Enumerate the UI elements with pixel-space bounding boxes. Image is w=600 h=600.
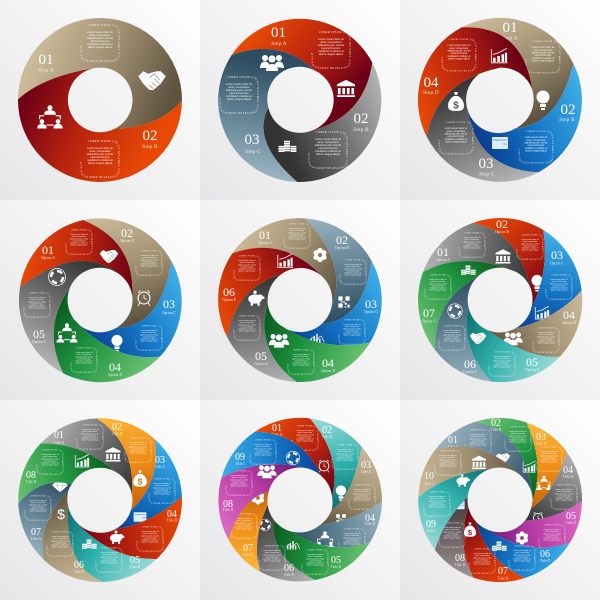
- segment 02 Step B: LOREM IPSUM DOLOR SIT AMET, CONSECTETUR ADIPISCING ELIT: [518, 130, 554, 164]
- segment 06 Title F: LOREM IPSUM DOLOR SIT AMET, CONSECTETUR ADIPISCING ELIT: [259, 545, 286, 572]
- segment 05 Title E: Lorem ipsum dolor sit amet, consectetur adipisicing elit, sed do eiusmod tempor incididunt ut labore et dolore magna aliqua: [543, 529, 561, 541]
- segment 01 Step A: LOREM IPSUM DOLOR SIT AMET, CONSECTETUR ADIPISCING ELIT: [311, 31, 351, 69]
- segment 05 Title E: [274, 520, 370, 580]
- segment 08 Title H: Title H: [455, 563, 466, 567]
- segment 04 Option D: [54, 288, 160, 382]
- segment 02 Option B: LOREM IPSUM DOLOR SIT AMET, CONSECTETUR ADIPISCING ELIT: [135, 250, 163, 276]
- segment 04 Title D: LOREM IPSUM DOLOR SIT AMET, CONSECTETUR ADIPISCING ELIT: [136, 526, 164, 552]
- segment 01 Option A: 01: [42, 243, 54, 257]
- segment 06 Title F: LOREM IPSUM DOLOR SIT AMET, CONSECTETUR ADIPISCING ELIT: [509, 545, 536, 572]
- segment 04 Step D: Step D: [423, 90, 439, 96]
- segment 05 Title E: Lorem ipsum dolor sit amet, consectetur adipisicing elit, sed do eiusmod tempor incididunt ut labore et dolore magna aliqua: [306, 554, 324, 566]
- segment 02 Step B: [264, 62, 382, 182]
- segment 07 Option G: [418, 261, 516, 350]
- segment 01 Option A: 01: [259, 228, 271, 242]
- segment 02 Option B: Lorem ipsum dolor sit amet, consectetur adipisicing elit, sed do eiusmod tempor incididunt ut labore et dolore magna aliqua: [521, 239, 539, 251]
- segment 10 Title J: LOREM IPSUM DOLOR SIT AMET, CONSECTETUR ADIPISCING ELIT: [435, 450, 462, 477]
- segment 08 Title H: Title H: [26, 480, 37, 484]
- segment 04 Title D: 04: [563, 465, 573, 476]
- segment 04 Option D: Lorem ipsum dolor sit amet, consectetur adipisicing elit, sed do eiusmod tempor incididunt ut labore et dolore magna aliqua: [75, 352, 93, 364]
- segment 10 Title J: Title J: [424, 482, 434, 486]
- segment 10 Title J: Lorem ipsum dolor sit amet, consectetur adipisicing elit, sed do eiusmod tempor incididunt ut labore et dolore magna aliqua: [439, 455, 457, 467]
- segment 02 Step B: [18, 68, 182, 182]
- segment 04 Option D: LOREM IPSUM DOLOR SIT AMET, CONSECTETUR ADIPISCING ELIT: [287, 349, 315, 375]
- segment 06 Title F: Title F: [74, 570, 84, 574]
- panel: 9-title ring: [218, 418, 382, 582]
- panel: 3-step ring: [218, 18, 382, 182]
- segment 03 Option C: 03: [551, 248, 563, 262]
- segment 10 Title J: 10: [424, 471, 434, 482]
- segment 02 Option B: 02: [496, 217, 508, 231]
- segment 05 Title E: LOREM IPSUM DOLOR SIT AMET, CONSECTETUR ADIPISCING ELIT: [95, 547, 123, 573]
- segment 06 Title F: Lorem ipsum dolor sit amet, consectetur adipisicing elit, sed do eiusmod tempor incididunt ut labore et dolore magna aliqua: [513, 550, 531, 562]
- segment 02 Option B: Option B: [495, 230, 510, 234]
- segment 05 Title E: [487, 501, 582, 551]
- segment 02 Step B: [468, 64, 582, 172]
- segment 03 Title C: Title C: [536, 442, 547, 446]
- segment 06 Title F: 06: [540, 549, 550, 560]
- segment 02 Step B: Step B: [142, 144, 158, 150]
- segment 05 Option E: Lorem ipsum dolor sit amet, consectetur adipisicing elit, sed do eiusmod tempor incididunt ut labore et dolore magna aliqua: [238, 320, 256, 332]
- segment 01 Option A: [232, 218, 336, 306]
- segment 02 Title B: Title B: [112, 432, 123, 436]
- segment 02 Option B: [84, 218, 172, 328]
- segment 02 Option B: 02: [121, 226, 133, 240]
- segment 03 Option C: LOREM IPSUM DOLOR SIT AMET, CONSECTETUR ADIPISCING ELIT: [545, 274, 573, 300]
- segment 04 Title D: [525, 452, 582, 524]
- segment 03 Step C: Lorem ipsum dolor sit amet, consectetur adipisicing elit, sed do eiusmod tempor incididunt ut labore et dolore magna aliqua: [226, 83, 252, 101]
- segment 06 Option F: 06: [464, 357, 476, 371]
- segment 07 Option G: Option G: [422, 320, 436, 324]
- segment 04 Option D: Option D: [108, 373, 122, 377]
- segment 01 Title A: [255, 418, 334, 497]
- segment 07 Title G: Lorem ipsum dolor sit amet, consectetur adipisicing elit, sed do eiusmod tempor incididunt ut labore et dolore magna aliqua: [29, 500, 47, 512]
- panel: 6-option ring: [218, 218, 382, 382]
- segment 05 Option E: 05: [255, 349, 267, 363]
- segment 04 Title D: Lorem ipsum dolor sit amet, consectetur adipisicing elit, sed do eiusmod tempor incididunt ut labore et dolore magna aliqua: [343, 533, 361, 545]
- segment 08 Title H: 08: [26, 470, 36, 481]
- segment 03 Title C: 03: [536, 432, 546, 443]
- segment 08 Title H: LOREM IPSUM DOLOR SIT AMET, CONSECTETUR ADIPISCING ELIT: [36, 449, 64, 475]
- segment 06 Title F: LOREM IPSUM DOLOR SIT AMET, CONSECTETUR ADIPISCING ELIT: [46, 531, 74, 557]
- segment 06 Option F: [218, 248, 322, 338]
- segment 02 Title B: Lorem ipsum dolor sit amet, consectetur adipisicing elit, sed do eiusmod tempor incididunt ut labore et dolore magna aliqua: [509, 431, 527, 443]
- segment 06 Title F: 06: [74, 560, 84, 571]
- segment 01 Title A: LOREM IPSUM DOLOR SIT AMET, CONSECTETUR ADIPISCING ELIT: [291, 425, 319, 451]
- segment 04 Step D: LOREM IPSUM DOLOR SIT AMET, CONSECTETUR ADIPISCING ELIT: [442, 38, 476, 72]
- segment 01 Step A: Step A: [502, 36, 518, 42]
- segment 04 Option D: 04: [563, 308, 575, 322]
- segment 06 Title F: Lorem ipsum dolor sit amet, consectetur adipisicing elit, sed do eiusmod tempor incididunt ut labore et dolore magna aliqua: [51, 536, 69, 548]
- segment 04 Title D: Lorem ipsum dolor sit amet, consectetur adipisicing elit, sed do eiusmod tempor incididunt ut labore et dolore magna aliqua: [555, 489, 573, 501]
- segment 08 Title H: Lorem ipsum dolor sit amet, consectetur adipisicing elit, sed do eiusmod tempor incididunt ut labore et dolore magna aliqua: [230, 475, 248, 487]
- segment 05 Title E: Title E: [331, 565, 342, 569]
- segment 04 Title D: [78, 496, 182, 559]
- segment 05 Option E: Option E: [32, 340, 47, 344]
- segment 09 Title I: [418, 469, 490, 550]
- panel: 10-title ring: [418, 418, 582, 582]
- segment 03 Step C: Lorem ipsum dolor sit amet, consectetur adipisicing elit, sed do eiusmod tempor incididunt ut labore et dolore magna aliqua: [444, 127, 468, 143]
- segment 02 Title B: [96, 418, 156, 510]
- segment 06 Title F: [257, 505, 315, 582]
- segment 09 Title I: Title I: [426, 529, 436, 533]
- segment 05 Title E: LOREM IPSUM DOLOR SIT AMET, CONSECTETUR ADIPISCING ELIT: [539, 524, 566, 551]
- segment 08 Title H: LOREM IPSUM DOLOR SIT AMET, CONSECTETUR ADIPISCING ELIT: [439, 522, 466, 549]
- segment 02 Title B: Lorem ipsum dolor sit amet, consectetur adipisicing elit, sed do eiusmod tempor incididunt ut labore et dolore magna aliqua: [129, 442, 147, 454]
- segment 05 Title E: Title E: [566, 521, 577, 525]
- segment 07 Title G: $: [468, 528, 473, 537]
- segment 01 Title A: Lorem ipsum dolor sit amet, consectetur adipisicing elit, sed do eiusmod tempor incididunt ut labore et dolore magna aliqua: [469, 434, 487, 446]
- segment 02 Step B: 02: [354, 111, 368, 127]
- segment 03 Step C: LOREM IPSUM DOLOR SIT AMET, CONSECTETUR ADIPISCING ELIT: [219, 76, 259, 114]
- segment 05 Option E: LOREM IPSUM DOLOR SIT AMET, CONSECTETUR ADIPISCING ELIT: [233, 315, 261, 341]
- segment 08 Title H: [218, 464, 303, 539]
- segment 02 Title B: [310, 418, 362, 510]
- segment 04 Option D: 04: [109, 360, 121, 374]
- segment 03 Title C: LOREM IPSUM DOLOR SIT AMET, CONSECTETUR ADIPISCING ELIT: [348, 484, 376, 510]
- segment 05 Option E: [466, 306, 560, 382]
- segment 06 Title F: [42, 490, 104, 582]
- segment 08 Title H: [435, 497, 473, 578]
- segment 06 Title F: 06: [284, 563, 294, 574]
- segment 06 Option F: Lorem ipsum dolor sit amet, consectetur adipisicing elit, sed do eiusmod tempor incididunt ut labore et dolore magna aliqua: [443, 330, 461, 342]
- segment 02 Step B: Lorem ipsum dolor sit amet, consectetur adipisicing elit, sed do eiusmod tempor incididunt ut labore et dolore magna aliqua: [315, 138, 341, 156]
- segment 08 Title H: [18, 443, 115, 503]
- segment 04 Option D: [264, 304, 370, 382]
- segment 08 Title H: Title H: [223, 508, 234, 512]
- panel: 7-option ring: [418, 217, 582, 382]
- segment 09 Title I: 09: [426, 519, 436, 530]
- segment 03 Step C: Step C: [479, 172, 495, 178]
- segment 05 Option E: LOREM IPSUM DOLOR SIT AMET, CONSECTETUR ADIPISCING ELIT: [488, 351, 516, 377]
- segment 07 Title G: 07: [498, 566, 508, 577]
- segment 02 Step B: LOREM IPSUM DOLOR SIT AMET, CONSECTETUR ADIPISCING ELIT: [308, 131, 348, 169]
- segment 02 Title B: 02: [112, 422, 122, 433]
- segment 04 Title D: 04: [167, 509, 177, 520]
- segment 10 Title J: [418, 446, 525, 497]
- segment 04 Step D: Lorem ipsum dolor sit amet, consectetur adipisicing elit, sed do eiusmod tempor incididunt ut labore et dolore magna aliqua: [447, 44, 471, 60]
- segment 07 Option G: Lorem ipsum dolor sit amet, consectetur adipisicing elit, sed do eiusmod tempor incididunt ut labore et dolore magna aliqua: [429, 279, 447, 291]
- segment 05 Option E: [227, 274, 296, 382]
- segment 03 Step C: 03: [478, 156, 494, 172]
- segment 01 Title A: LOREM IPSUM DOLOR SIT AMET, CONSECTETUR ADIPISCING ELIT: [465, 429, 492, 456]
- segment 06 Option F: LOREM IPSUM DOLOR SIT AMET, CONSECTETUR ADIPISCING ELIT: [438, 325, 466, 351]
- segment 01 Title A: Lorem ipsum dolor sit amet, consectetur adipisicing elit, sed do eiusmod tempor incididunt ut labore et dolore magna aliqua: [296, 430, 314, 442]
- segment 02 Option B: LOREM IPSUM DOLOR SIT AMET, CONSECTETUR ADIPISCING ELIT: [516, 234, 544, 260]
- segment 02 Title B: Title B: [491, 428, 502, 432]
- segment 05 Option E: Option E: [525, 368, 540, 372]
- segment 04 Title D: Title D: [167, 518, 178, 522]
- segment 05 Option E: 05: [33, 327, 45, 341]
- segment 03 Option C: LOREM IPSUM DOLOR SIT AMET, CONSECTETUR ADIPISCING ELIT: [135, 325, 163, 351]
- segment 06 Option F: [435, 277, 492, 382]
- segment 01 Title A: 01: [272, 423, 282, 434]
- segment 02 Step B: 02: [560, 102, 576, 118]
- segment 01 Step A: LOREM IPSUM DOLOR SIT AMET, CONSECTETUR ADIPISCING ELIT: [80, 24, 120, 62]
- segment 01 Title A: [40, 418, 132, 495]
- segment 02 Title B: LOREM IPSUM DOLOR SIT AMET, CONSECTETUR ADIPISCING ELIT: [331, 444, 359, 470]
- segment 08 Title H: 08: [223, 499, 233, 510]
- segment 04 Title D: [292, 502, 382, 555]
- segment 01 Option A: [20, 220, 132, 296]
- segment 04 Title D: Title D: [563, 475, 574, 479]
- segment 06 Option F: LOREM IPSUM DOLOR SIT AMET, CONSECTETUR ADIPISCING ELIT: [233, 255, 261, 281]
- segment 02 Step B: LOREM IPSUM DOLOR SIT AMET, CONSECTETUR ADIPISCING ELIT: [80, 140, 120, 178]
- segment 03 Step C: Step C: [245, 149, 261, 155]
- segment 03 Step C: [218, 48, 315, 182]
- segment 02 Option B: Lorem ipsum dolor sit amet, consectetur adipisicing elit, sed do eiusmod tempor incididunt ut labore et dolore magna aliqua: [344, 264, 362, 276]
- segment 01 Step A: 01: [502, 20, 518, 36]
- segment 02 Step B: Step B: [559, 117, 575, 123]
- segment 04 Title D: Title D: [365, 522, 376, 526]
- segment 03 Option C: [280, 261, 382, 346]
- segment 05 Option E: 05: [526, 355, 538, 369]
- segment 01 Title A: Lorem ipsum dolor sit amet, consectetur adipisicing elit, sed do eiusmod tempor incididunt ut labore et dolore magna aliqua: [81, 429, 99, 441]
- segment 09 Title I: Lorem ipsum dolor sit amet, consectetur adipisicing elit, sed do eiusmod tempor incididunt ut labore et dolore magna aliqua: [428, 496, 446, 508]
- segment 03 Title C: 03: [155, 455, 165, 466]
- segment 09 Title I: LOREM IPSUM DOLOR SIT AMET, CONSECTETUR ADIPISCING ELIT: [424, 491, 451, 518]
- segment 02 Option B: Option B: [120, 239, 135, 243]
- segment 07 Option G: 07: [423, 306, 435, 320]
- segment 01 Title A: Title A: [272, 433, 283, 437]
- segment 02 Step B: Lorem ipsum dolor sit amet, consectetur adipisicing elit, sed do eiusmod tempor incididunt ut labore et dolore magna aliqua: [524, 136, 548, 152]
- segment 03 Title C: [527, 423, 567, 508]
- segment 03 Title C: LOREM IPSUM DOLOR SIT AMET, CONSECTETUR ADIPISCING ELIT: [148, 478, 176, 504]
- segment 04 Title D: Lorem ipsum dolor sit amet, consectetur adipisicing elit, sed do eiusmod tempor incididunt ut labore et dolore magna aliqua: [141, 531, 159, 543]
- segment 02 Option B: Lorem ipsum dolor sit amet, consectetur adipisicing elit, sed do eiusmod tempor incididunt ut labore et dolore magna aliqua: [140, 255, 158, 267]
- segment 01 Step A: LOREM IPSUM DOLOR SIT AMET, CONSECTETUR ADIPISCING ELIT: [526, 40, 560, 74]
- segment 06 Title F: Title F: [284, 573, 294, 577]
- segment 05 Option E: [18, 260, 114, 373]
- segment 04 Option D: [488, 290, 582, 357]
- segment 06 Option F: Lorem ipsum dolor sit amet, consectetur adipisicing elit, sed do eiusmod tempor incididunt ut labore et dolore magna aliqua: [238, 260, 256, 272]
- segment 03 Title C: Lorem ipsum dolor sit amet, consectetur adipisicing elit, sed do eiusmod tempor incididunt ut labore et dolore magna aliqua: [153, 483, 171, 495]
- segment 09 Title I: LOREM IPSUM DOLOR SIT AMET, CONSECTETUR ADIPISCING ELIT: [250, 439, 277, 466]
- segment 02 Title B: 02: [491, 418, 501, 429]
- segment 05 Option E: Lorem ipsum dolor sit amet, consectetur adipisicing elit, sed do eiusmod tempor incididunt ut labore et dolore magna aliqua: [493, 356, 511, 368]
- segment 07 Title G: Title G: [31, 537, 42, 541]
- panel: 8-title ring: [18, 418, 182, 582]
- segment 05 Option E: Option E: [254, 362, 269, 366]
- panel: 4-step ring: [418, 18, 582, 182]
- segment 05 Option E: Lorem ipsum dolor sit amet, consectetur adipisicing elit, sed do eiusmod tempor incididunt ut labore et dolore magna aliqua: [28, 297, 46, 309]
- segment 02 Title B: 02: [322, 425, 332, 436]
- segment 01 Title A: LOREM IPSUM DOLOR SIT AMET, CONSECTETUR ADIPISCING ELIT: [76, 424, 104, 450]
- panel: 2-step ring: [18, 18, 182, 182]
- segment 05 Title E: Title E: [130, 565, 141, 569]
- segment 03 Title C: [115, 440, 182, 530]
- segment 04 Option D: Lorem ipsum dolor sit amet, consectetur adipisicing elit, sed do eiusmod tempor incididunt ut labore et dolore magna aliqua: [537, 332, 555, 344]
- segment 01 Option A: Lorem ipsum dolor sit amet, consectetur adipisicing elit, sed do eiusmod tempor incididunt ut labore et dolore magna aliqua: [463, 237, 481, 249]
- segment 03 Step C: 03: [244, 132, 260, 148]
- segment 04 Step D: [418, 27, 532, 136]
- segment 01 Step A: [232, 18, 372, 130]
- segment 07 Title G: LOREM IPSUM DOLOR SIT AMET, CONSECTETUR ADIPISCING ELIT: [469, 548, 496, 575]
- segment 01 Title A: Title A: [54, 441, 65, 445]
- segment 03 Step C: [426, 68, 538, 182]
- segment 03 Title C: Title C: [155, 465, 166, 469]
- segment 01 Step A: [18, 18, 182, 128]
- segment 01 Step A: 01: [271, 25, 286, 41]
- segment 07 Title G: 07: [243, 543, 253, 554]
- segment 04 Title D: LOREM IPSUM DOLOR SIT AMET, CONSECTETUR ADIPISCING ELIT: [551, 484, 578, 511]
- segment 07 Title G: [463, 507, 525, 582]
- segment 01 Option A: 01: [437, 245, 449, 259]
- segment 02 Step B: 02: [142, 128, 158, 144]
- segment 03 Title C: Lorem ipsum dolor sit amet, consectetur adipisicing elit, sed do eiusmod tempor incididunt ut labore et dolore magna aliqua: [540, 451, 558, 463]
- segment 02 Option B: 02: [336, 233, 348, 247]
- segment 06 Title F: Title F: [540, 559, 550, 563]
- segment 01 Option A: Option A: [41, 256, 55, 260]
- segment 06 Option F: 06: [223, 285, 235, 299]
- segment 04 Title D: 04: [365, 513, 375, 524]
- segment 07 Title G: LOREM IPSUM DOLOR SIT AMET, CONSECTETUR ADIPISCING ELIT: [231, 513, 258, 540]
- segment 01 Step A: Step A: [38, 68, 54, 74]
- segment 05 Title E: 05: [130, 555, 140, 566]
- segment 03 Option C: LOREM IPSUM DOLOR SIT AMET, CONSECTETUR ADIPISCING ELIT: [338, 319, 366, 345]
- segment 09 Title I: [222, 432, 321, 477]
- segment 04 Option D: LOREM IPSUM DOLOR SIT AMET, CONSECTETUR ADIPISCING ELIT: [532, 327, 560, 353]
- panel: 5-option ring: [18, 218, 182, 382]
- segment 06 Title F: [476, 522, 570, 578]
- segment 04 Option D: Lorem ipsum dolor sit amet, consectetur adipisicing elit, sed do eiusmod tempor incididunt ut labore et dolore magna aliqua: [292, 354, 310, 366]
- segment 03 Option C: [515, 230, 582, 328]
- segment 04 Option D: LOREM IPSUM DOLOR SIT AMET, CONSECTETUR ADIPISCING ELIT: [70, 347, 98, 373]
- segment 08 Title H: 08: [455, 553, 465, 564]
- segment 03 Option C: Option C: [550, 262, 565, 266]
- segment 08 Title H: Lorem ipsum dolor sit amet, consectetur adipisicing elit, sed do eiusmod tempor incididunt ut labore et dolore magna aliqua: [41, 454, 59, 466]
- segment 04 Title D: LOREM IPSUM DOLOR SIT AMET, CONSECTETUR ADIPISCING ELIT: [338, 528, 366, 548]
- segment 08 Title H: LOREM IPSUM DOLOR SIT AMET, CONSECTETUR ADIPISCING ELIT: [226, 470, 253, 497]
- segment 04 Step D: 04: [424, 75, 439, 91]
- segment 06 Option F: Option F: [463, 370, 477, 374]
- segment 03 Title C: 03: [361, 460, 371, 471]
- segment 01 Title A: Title A: [448, 445, 459, 449]
- segment 01 Step A: Lorem ipsum dolor sit amet, consectetur adipisicing elit, sed do eiusmod tempor incididunt ut labore et dolore magna aliqua: [531, 46, 555, 62]
- segment 03 Title C: LOREM IPSUM DOLOR SIT AMET, CONSECTETUR ADIPISCING ELIT: [536, 446, 563, 473]
- segment 07 Title G: [18, 481, 72, 559]
- segment 03 Option C: Option C: [162, 311, 177, 315]
- segment 01 Step A: 01: [38, 52, 54, 68]
- segment 07 Title G: Title G: [243, 553, 254, 557]
- segment 02 Title B: Title B: [322, 435, 333, 439]
- segment 01 Step A: Step A: [271, 41, 287, 47]
- segment 03 Step C: $: [453, 100, 459, 112]
- segment 05 Option E: LOREM IPSUM DOLOR SIT AMET, CONSECTETUR ADIPISCING ELIT: [23, 292, 51, 318]
- segment 02 Step B: Lorem ipsum dolor sit amet, consectetur adipisicing elit, sed do eiusmod tempor incididunt ut labore et dolore magna aliqua: [87, 147, 113, 165]
- segment 02 Title B: LOREM IPSUM DOLOR SIT AMET, CONSECTETUR ADIPISCING ELIT: [505, 426, 532, 453]
- segment 01 Option A: Lorem ipsum dolor sit amet, consectetur adipisicing elit, sed do eiusmod tempor incididunt ut labore et dolore magna aliqua: [70, 234, 88, 246]
- segment 02 Option B: [305, 218, 372, 324]
- segment 03 Option C: 03: [163, 297, 175, 311]
- segment 03 Option C: 03: [365, 297, 377, 311]
- segment 02 Title B: LOREM IPSUM DOLOR SIT AMET, CONSECTETUR ADIPISCING ELIT: [124, 437, 152, 463]
- segment 03 Step C: LOREM IPSUM DOLOR SIT AMET, CONSECTETUR ADIPISCING ELIT: [438, 122, 474, 154]
- segment 02 Option B: Option B: [335, 246, 350, 250]
- segment 03 Option C: Lorem ipsum dolor sit amet, consectetur adipisicing elit, sed do eiusmod tempor incididunt ut labore et dolore magna aliqua: [550, 279, 568, 291]
- segment 03 Option C: Lorem ipsum dolor sit amet, consectetur adipisicing elit, sed do eiusmod tempor incididunt ut labore et dolore magna aliqua: [343, 324, 361, 336]
- segment 01 Option A: LOREM IPSUM DOLOR SIT AMET, CONSECTETUR ADIPISCING ELIT: [283, 223, 311, 249]
- segment 01 Title A: 01: [54, 430, 64, 441]
- segment 01 Step A: [462, 18, 574, 128]
- segment 07 Title G: LOREM IPSUM DOLOR SIT AMET, CONSECTETUR ADIPISCING ELIT: [24, 495, 52, 521]
- segment 05 Title E: LOREM IPSUM DOLOR SIT AMET, CONSECTETUR ADIPISCING ELIT: [301, 549, 329, 575]
- segment 03 Title C: [320, 447, 382, 525]
- segment 02 Step B: Step B: [353, 127, 369, 133]
- segment 02 Title B: [476, 418, 538, 502]
- segment 04 Option D: 04: [322, 356, 334, 370]
- segment 01 Step A: Lorem ipsum dolor sit amet, consectetur adipisicing elit, sed do eiusmod tempor incididunt ut labore et dolore magna aliqua: [318, 38, 344, 56]
- segment 03 Option C: Option C: [364, 310, 379, 314]
- segment 03 Option C: Lorem ipsum dolor sit amet, consectetur adipisicing elit, sed do eiusmod tempor incididunt ut labore et dolore magna aliqua: [140, 330, 158, 342]
- segment 02 Title B: $: [138, 477, 143, 487]
- segment 09 Title I: 09: [235, 452, 245, 463]
- segment 07 Title G: Lorem ipsum dolor sit amet, consectetur adipisicing elit, sed do eiusmod tempor incididunt ut labore et dolore magna aliqua: [235, 518, 253, 530]
- segment 09 Title I: Lorem ipsum dolor sit amet, consectetur adipisicing elit, sed do eiusmod tempor incididunt ut labore et dolore magna aliqua: [254, 444, 272, 456]
- segment 03 Title C: Lorem ipsum dolor sit amet, consectetur adipisicing elit, sed do eiusmod tempor incididunt ut labore et dolore magna aliqua: [353, 489, 371, 501]
- segment 01 Option A: LOREM IPSUM DOLOR SIT AMET, CONSECTETUR ADIPISCING ELIT: [65, 229, 93, 255]
- segment 01 Title A: [435, 422, 533, 498]
- segment 05 Title E: Lorem ipsum dolor sit amet, consectetur adipisicing elit, sed do eiusmod tempor incididunt ut labore et dolore magna aliqua: [100, 552, 118, 564]
- segment 07 Option G: LOREM IPSUM DOLOR SIT AMET, CONSECTETUR ADIPISCING ELIT: [424, 274, 452, 300]
- segment 04 Option D: Option D: [321, 369, 335, 373]
- segment 01 Option A: LOREM IPSUM DOLOR SIT AMET, CONSECTETUR ADIPISCING ELIT: [458, 232, 486, 258]
- segment 01 Option A: Option A: [258, 241, 272, 245]
- segment 02 Title B: Lorem ipsum dolor sit amet, consectetur adipisicing elit, sed do eiusmod tempor incididunt ut labore et dolore magna aliqua: [336, 449, 354, 461]
- segment 03 Title C: Title C: [361, 470, 372, 474]
- segment 01 Option A: Option A: [436, 258, 450, 262]
- segment 09 Title I: Title I: [235, 462, 245, 466]
- segment 07 Title G: Title G: [498, 576, 509, 580]
- segment 07 Title G: [228, 491, 269, 572]
- segment 08 Title H: Lorem ipsum dolor sit amet, consectetur adipisicing elit, sed do eiusmod tempor incididunt ut labore et dolore magna aliqua: [443, 527, 461, 539]
- segment 07 Title G: 07: [31, 527, 41, 538]
- segment 01 Option A: Lorem ipsum dolor sit amet, consectetur adipisicing elit, sed do eiusmod tempor incididunt ut labore et dolore magna aliqua: [288, 228, 306, 240]
- segment 02 Option B: LOREM IPSUM DOLOR SIT AMET, CONSECTETUR ADIPISCING ELIT: [339, 259, 367, 285]
- segment 06 Title F: $: [57, 506, 65, 522]
- segment 02 Option B: [472, 217, 545, 306]
- segment 04 Option D: Option D: [562, 321, 576, 325]
- segment 07 Title G: Lorem ipsum dolor sit amet, consectetur adipisicing elit, sed do eiusmod tempor incididunt ut labore et dolore magna aliqua: [473, 553, 491, 565]
- segment 01 Option A: [423, 223, 530, 288]
- segment 06 Title F: Lorem ipsum dolor sit amet, consectetur adipisicing elit, sed do eiusmod tempor incididunt ut labore et dolore magna aliqua: [263, 550, 281, 562]
- segment 03 Option C: [74, 262, 182, 358]
- segment 01 Title A: 01: [448, 435, 458, 446]
- segment 06 Option F: Option F: [222, 298, 236, 302]
- segment 05 Title E: [68, 507, 156, 582]
- segment 05 Title E: 05: [331, 555, 341, 566]
- segment 01 Step A: Lorem ipsum dolor sit amet, consectetur adipisicing elit, sed do eiusmod tempor incididunt ut labore et dolore magna aliqua: [87, 31, 113, 49]
- segment 05 Title E: 05: [566, 511, 576, 522]
